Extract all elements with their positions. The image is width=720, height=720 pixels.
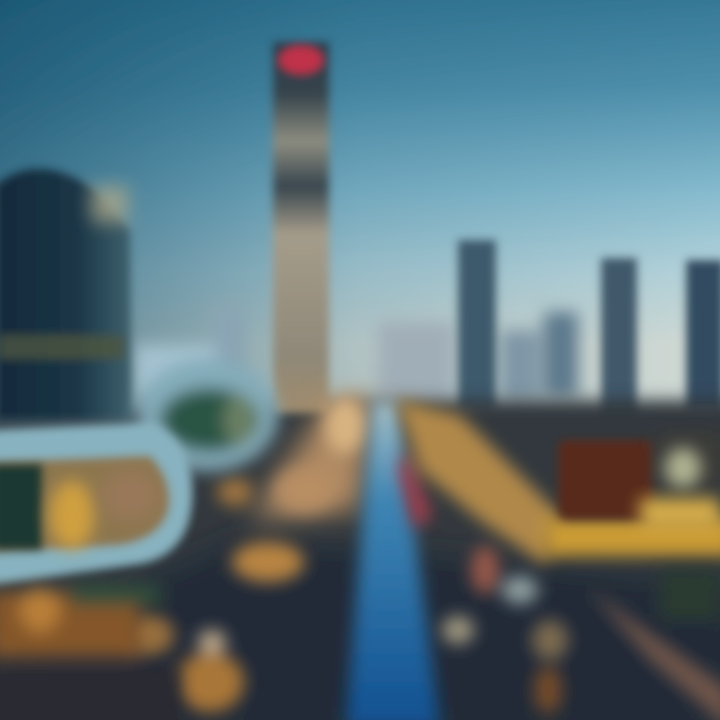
left glass rounded pavilion upper: [138, 359, 278, 471]
canal water: [346, 400, 440, 720]
red tower top: [278, 45, 324, 75]
distant hazy buildings: [135, 305, 578, 402]
left lit road glow: [250, 395, 372, 520]
right golden lit building: [545, 430, 720, 620]
left road lights: [126, 397, 365, 712]
right lit road glow: [395, 398, 720, 720]
central tall tower: [273, 42, 329, 412]
left foreground lit terrace: [0, 585, 180, 720]
ground base: [0, 400, 720, 720]
right skyline towers: [458, 240, 720, 418]
left glass pavilion lower: [0, 422, 192, 585]
left dark building: [0, 169, 132, 420]
lower ground dark: [0, 540, 720, 720]
